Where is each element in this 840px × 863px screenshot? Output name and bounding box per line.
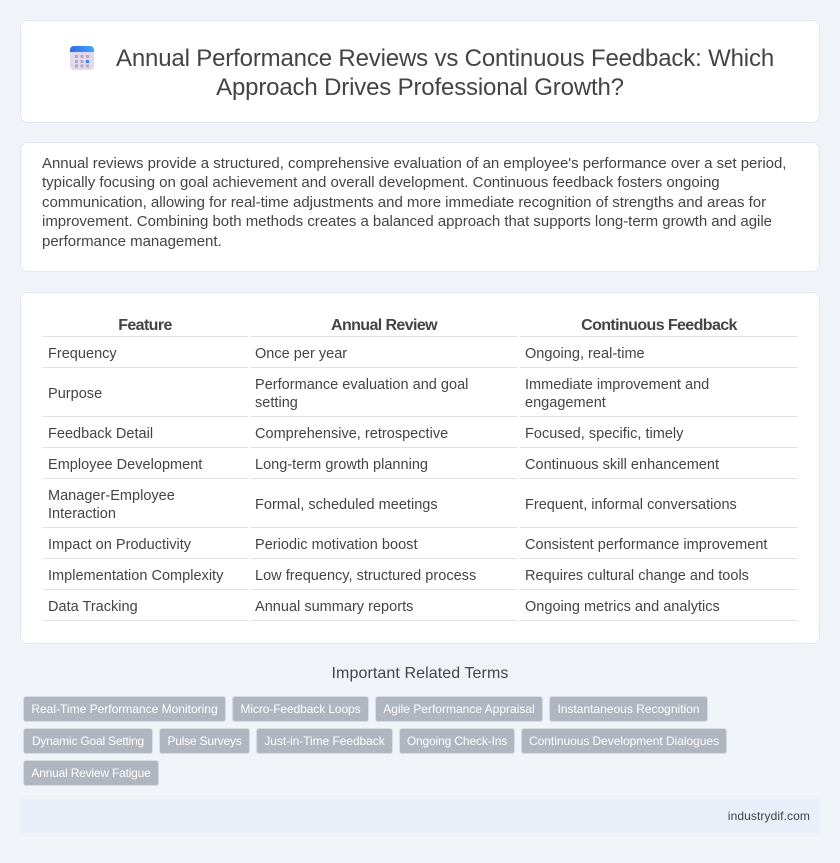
feedback detail: continuous: Focused, specific, timely (525, 426, 683, 442)
row: manager-employee interaction: Interaction (48, 506, 116, 522)
tag: Just-in-Time Feedback (264, 734, 385, 748)
panel: title header (20, 20, 820, 123)
table header: continuous feedback: Continuous Feedback (581, 317, 737, 334)
tag (23, 696, 226, 722)
table header: annual review: Annual Review (331, 317, 437, 334)
tag (23, 728, 153, 754)
row: impact on productivity: Impact on Productivity (48, 537, 191, 553)
frequency: continuous: Ongoing, real-time (525, 346, 645, 362)
tag (521, 728, 727, 754)
intro text block: typically focusing on goal achievement and overall development. Continuous feedback fosters ongoing (42, 174, 720, 191)
row: manager-employee interaction (48, 488, 175, 522)
tag: Dynamic Goal Setting (32, 734, 144, 748)
intro text block: performance management. (42, 233, 222, 250)
panel: intro text (20, 142, 820, 272)
icon: calendar (70, 46, 94, 70)
tag (159, 728, 250, 754)
table header: feature: Feature (118, 317, 172, 334)
manager-employee interaction: annual: Formal, scheduled meetings (255, 497, 438, 513)
impact on productivity: continuous: Consistent performance improvement (525, 537, 767, 553)
intro text block: communication, allowing for real-time adjustments and more immediate recognition of strengths and areas for (42, 194, 766, 211)
tag (232, 696, 369, 722)
row: feedback detail: Feedback Detail (48, 426, 153, 442)
implementation complexity: continuous: Requires cultural change and tools (525, 568, 749, 584)
tag: Micro-Feedback Loops (240, 702, 361, 716)
implementation complexity: annual: Low frequency, structured process (255, 568, 476, 584)
row: manager-employee interaction: Manager-Employee (48, 488, 175, 504)
panel: comparison table (20, 292, 820, 644)
intro text block (42, 155, 786, 250)
footer bar (20, 799, 820, 833)
purpose: annual: Performance evaluation and goal (255, 377, 468, 393)
title: Annual Performance Reviews vs Continuous Feedback: Which (116, 45, 774, 72)
tag: Ongoing Check-Ins (407, 734, 507, 748)
purpose: annual (255, 377, 468, 411)
row: employee development: Employee Development (48, 457, 202, 473)
impact on productivity: annual: Periodic motivation boost (255, 537, 418, 553)
tag (23, 760, 159, 786)
row: purpose: Purpose (48, 386, 102, 402)
purpose: continuous: Immediate improvement and (525, 377, 709, 393)
frequency: annual: Once per year (255, 346, 347, 362)
tag (375, 696, 543, 722)
tag (399, 728, 515, 754)
feedback detail: annual: Comprehensive, retrospective (255, 426, 448, 442)
tag: Pulse Surveys (167, 734, 242, 748)
intro text block: Annual reviews provide a structured, comprehensive evaluation of an employee's performance over a set period, (42, 155, 786, 172)
footer source text: industrydif.com (728, 808, 810, 822)
tag: Continuous Development Dialogues (529, 734, 719, 748)
data tracking: annual: Annual summary reports (255, 599, 413, 615)
tag: Real-Time Performance Monitoring (31, 702, 218, 716)
manager-employee interaction: continuous: Frequent, informal conversations (525, 497, 737, 513)
purpose: annual: setting (255, 395, 298, 411)
tag (549, 696, 708, 722)
intro text block: improvement. Combining both methods creates a balanced approach that supports long-term growth and agile (42, 213, 772, 230)
purpose: continuous (525, 377, 709, 411)
employee development: annual: Long-term growth planning (255, 457, 428, 473)
tag: Annual Review Fatigue (31, 766, 151, 780)
title (116, 45, 774, 101)
title: Approach Drives Professional Growth? (216, 74, 624, 101)
row: implementation complexity: Implementation Complexity (48, 568, 223, 584)
data tracking: continuous: Ongoing metrics and analytics (525, 599, 720, 615)
tag: Instantaneous Recognition (557, 702, 700, 716)
heading: important related terms: Important Related Terms (332, 665, 508, 682)
tag (256, 728, 393, 754)
employee development: continuous: Continuous skill enhancement (525, 457, 719, 473)
row: data tracking: Data Tracking (48, 599, 138, 615)
purpose: continuous: engagement (525, 395, 606, 411)
tag: Agile Performance Appraisal (383, 702, 535, 716)
row: frequency: Frequency (48, 346, 117, 362)
